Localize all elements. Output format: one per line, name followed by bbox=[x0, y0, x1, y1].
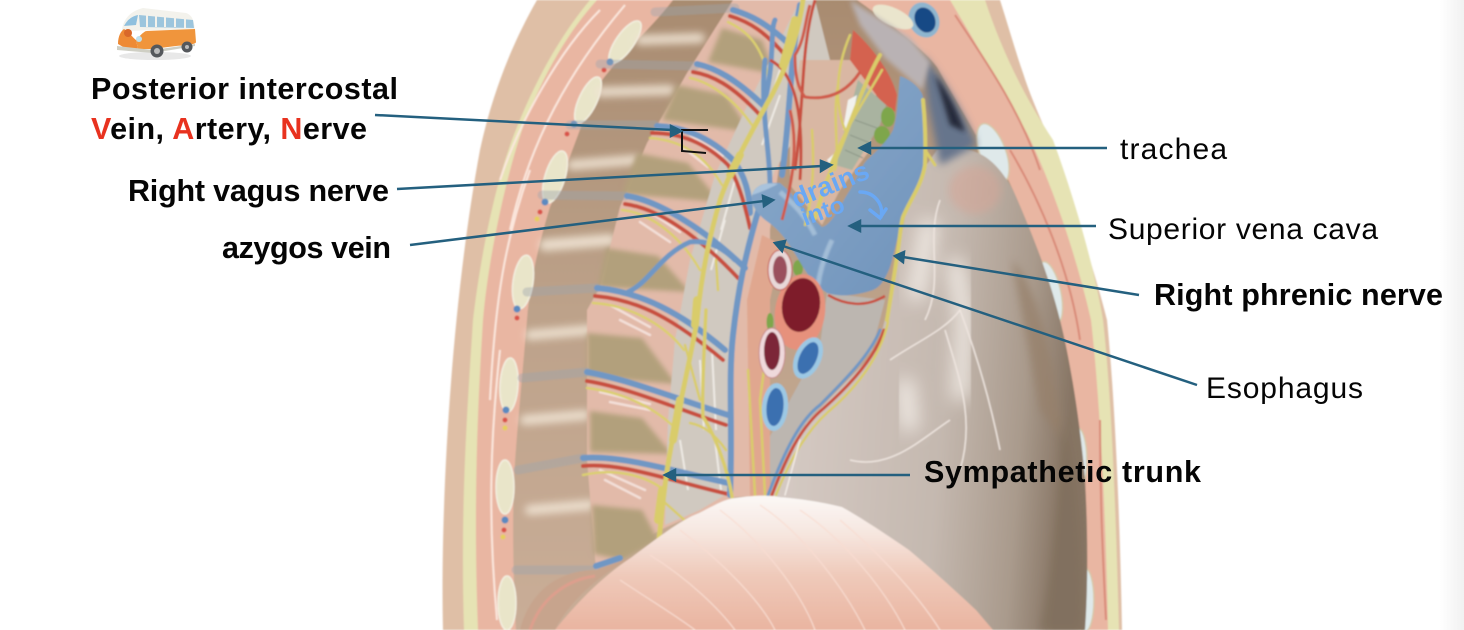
diaphragm dome bbox=[555, 496, 993, 630]
ring 1 bbox=[768, 250, 792, 290]
handwritten note: drains into: drains bbox=[787, 155, 873, 214]
handwritten note: drains into bbox=[787, 155, 886, 232]
arrow: esophagus bbox=[775, 241, 1197, 385]
anatomical illustration: thoracic cavity bbox=[443, 0, 1122, 630]
arrow: posterior intercostal bbox=[375, 115, 681, 136]
label: right vagus nerve: Right vagus nerve bbox=[128, 174, 389, 208]
arrow: azygos vein bbox=[410, 196, 773, 245]
label: posterior intercostal bbox=[91, 72, 398, 146]
lateral faded segments bbox=[516, 8, 735, 570]
ring 2 bbox=[759, 328, 785, 378]
dark upper recess bbox=[922, 55, 977, 165]
pericardiacophrenic bundle and right phrenic nerve bbox=[768, 100, 935, 495]
grey paravertebral strip bbox=[665, 0, 830, 525]
label: esophagus: Esophagus bbox=[1206, 372, 1363, 405]
blue ring 2 bbox=[760, 382, 790, 432]
top right vessel bbox=[869, 0, 945, 43]
aorta bbox=[770, 271, 830, 353]
trachea bbox=[827, 80, 886, 170]
superior vena cava and azygos arch bbox=[752, 76, 927, 295]
intercostal bundles bbox=[516, 8, 790, 570]
label: posterior intercostal: Posterior intercostal bbox=[91, 72, 398, 106]
sympathetic trunk bbox=[658, 0, 803, 540]
label: superior vena cava: Superior vena cava bbox=[1108, 213, 1378, 246]
arteries bbox=[583, 16, 785, 494]
veins bbox=[583, 10, 790, 566]
intercostal vessels in wall bbox=[500, 58, 614, 540]
subclavian artery bbox=[850, 30, 897, 112]
lateral wall light bands bbox=[525, 38, 700, 510]
mediastinal grey tissue bbox=[768, 293, 885, 497]
rib cross sections, left bbox=[496, 16, 647, 630]
handwritten note: drains into: into bbox=[798, 191, 848, 232]
arrow: sympathetic trunk bbox=[665, 470, 910, 480]
right vagus nerve plexus bbox=[805, 35, 882, 225]
rib cross sections, right bbox=[970, 119, 1094, 630]
label: sympathetic trunk: Sympathetic trunk bbox=[924, 455, 1201, 489]
arrow: superior vena cava bbox=[850, 221, 1096, 231]
arrow: right phrenic nerve bbox=[895, 252, 1139, 295]
body wall bbox=[443, 0, 1122, 630]
upper tissue behind vessels bbox=[790, 60, 880, 225]
azygos vein tributaries bbox=[628, 5, 800, 495]
icon: camper van bbox=[117, 8, 196, 60]
arrow: right vagus nerve bbox=[397, 161, 831, 189]
label: azygos vein: azygos vein bbox=[222, 231, 391, 265]
great vessels in cross section bbox=[759, 250, 830, 432]
bracket marking the intercostal bundle bbox=[682, 130, 708, 153]
label: posterior intercostal: Vein, Artery, Nerve bbox=[91, 112, 367, 146]
esophagus strip bbox=[747, 235, 782, 497]
nerves bbox=[583, 22, 768, 490]
posterior wall: intercostal muscle bbox=[587, 0, 810, 570]
pericardium and lung surface bbox=[772, 149, 1087, 630]
side shadow bbox=[1440, 0, 1464, 630]
arrow: trachea bbox=[860, 143, 1107, 153]
label: right phrenic nerve: Right phrenic nerve bbox=[1154, 278, 1443, 312]
lower left pleural fold bbox=[520, 557, 632, 630]
lymph nodes bbox=[766, 107, 895, 331]
white muscle fibre highlights bbox=[600, 135, 725, 498]
posterior wall: tan rib bands bbox=[587, 28, 775, 560]
blue ring 1 bbox=[787, 333, 829, 383]
cavity base bbox=[513, 0, 1086, 630]
label: trachea: trachea bbox=[1120, 133, 1227, 166]
